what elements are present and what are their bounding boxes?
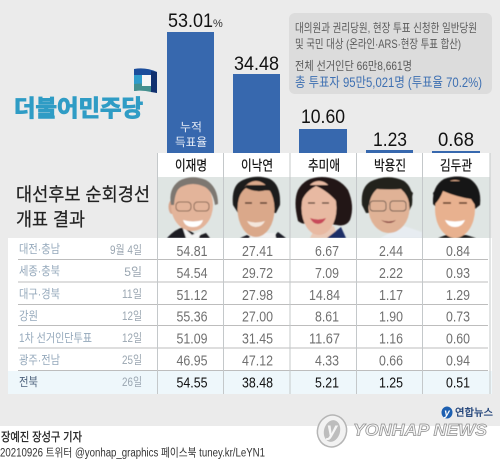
bar: 이낙연 — [233, 54, 280, 153]
row: 대구·경북: 1.17 — [379, 288, 403, 304]
row: 세종·충북 — [19, 264, 470, 282]
bar: 김두관: 0.68 — [438, 130, 474, 151]
photo: 김두관 — [433, 176, 480, 238]
row: 세종·충북: 세종·충북 — [19, 264, 60, 278]
row: 1차 선거인단투표: 0.60 — [446, 332, 470, 348]
photo: 이낙연 — [233, 177, 286, 238]
row: 대전·충남: 0.84 — [446, 244, 470, 260]
candidate name header — [157, 153, 490, 177]
row: 대전·충남: 27.41 — [242, 244, 273, 260]
row: 세종·충북: 2.22 — [379, 266, 403, 282]
info box: vote summary: 전체 선거인단 66만8,661명 — [295, 59, 412, 73]
candidate name header: 이낙연 — [241, 158, 273, 174]
row: 대전·충남: 9월 4일 — [110, 243, 142, 257]
row: 세종·충북: 54.54 — [176, 266, 208, 282]
title: 대선후보 순회경선 — [16, 184, 150, 205]
watermark: yonhap news — [314, 412, 488, 450]
candidate name header: 박용진 — [374, 158, 406, 174]
row: 강원: 강원 — [19, 309, 38, 323]
row: 전북: 26일 — [122, 375, 142, 389]
candidate name header: 이재명 — [175, 158, 207, 174]
results table — [8, 153, 492, 394]
yonhap logo: y — [443, 408, 450, 419]
row: 대구·경북: 27.98 — [242, 288, 273, 304]
party logo — [14, 68, 157, 121]
row: 전북 — [19, 375, 470, 392]
yonhap logo — [442, 406, 493, 419]
watermark: yonhap news: y — [326, 420, 339, 441]
row: 강원: 55.36 — [176, 310, 208, 326]
row: 전북: 5.21 — [315, 376, 339, 392]
photo: 이재명 — [167, 177, 218, 238]
row: 1차 선거인단투표: 51.09 — [176, 332, 208, 348]
row: 광주·전남: 47.12 — [242, 354, 273, 370]
title: 개표 결과 — [16, 209, 85, 230]
candidate name header: 추미애 — [308, 158, 340, 174]
row: 광주·전남: 4.33 — [315, 354, 339, 370]
row: 강원 — [19, 309, 470, 326]
row: 대전·충남: 대전·충남 — [19, 242, 60, 256]
party name: 더불어민주당 — [14, 95, 143, 121]
row: 광주·전남: 25일 — [122, 353, 142, 367]
row: 광주·전남: 0.94 — [446, 354, 470, 370]
bar: 이재명: % — [213, 18, 223, 30]
row: 대구·경북 — [19, 287, 470, 304]
photo: 추미애 — [296, 177, 352, 238]
bar: 이재명: 53.01 — [168, 11, 213, 32]
row: 광주·전남: 광주·전남 — [19, 353, 60, 367]
row: 1차 선거인단투표: 12일 — [122, 331, 142, 345]
credits — [0, 430, 265, 459]
row: 전북: 38.48 — [242, 376, 273, 392]
row: 전북: 1.25 — [379, 376, 403, 392]
bar: 추미애: 10.60 — [301, 107, 345, 128]
title — [16, 184, 150, 230]
row: 1차 선거인단투표: 31.45 — [242, 332, 273, 348]
candidate name header: 김두관 — [440, 158, 472, 174]
row: 세종·충북: 5일 — [124, 265, 142, 279]
row: 강원: 0.73 — [446, 310, 470, 326]
bar: 이재명: 득표율 — [175, 136, 207, 149]
yonhap logo: 연합뉴스 — [455, 407, 493, 419]
row: 대전·충남: 2.44 — [379, 244, 403, 260]
row: 1차 선거인단투표: 11.67 — [309, 332, 340, 348]
row: 세종·충북: 7.09 — [315, 266, 339, 282]
row: 강원: 12일 — [122, 309, 142, 323]
row: 세종·충북: 0.93 — [446, 266, 470, 282]
row: 1차 선거인단투표 — [19, 331, 470, 348]
row: 전북: 전북 — [19, 375, 38, 389]
row: 대구·경북: 대구·경북 — [19, 287, 60, 301]
info box: vote summary — [289, 13, 492, 94]
row: 강원: 8.61 — [315, 310, 339, 326]
candidate photos — [157, 176, 490, 238]
row: 광주·전남 — [19, 353, 470, 370]
bar chart: cumulative vote share — [167, 11, 480, 153]
watermark: yonhap news: YONHAP NEWS — [353, 420, 488, 440]
bar: 이재명 — [167, 11, 223, 153]
row: 광주·전남: 46.95 — [176, 354, 208, 370]
row: 1차 선거인단투표: 1.16 — [379, 332, 403, 348]
row: 전북: 0.51 — [446, 376, 470, 392]
bar: 박용진: 1.23 — [373, 130, 407, 151]
bar: 추미애 — [299, 107, 347, 153]
row: 강원: 27.00 — [242, 310, 273, 326]
row: 1차 선거인단투표: 1차 선거인단투표 — [19, 331, 92, 345]
credits: 장예진 장성구 기자 — [1, 430, 82, 444]
row: 전북: 54.55 — [176, 376, 208, 392]
icon: party flag — [134, 68, 157, 93]
row: 대전·충남 — [19, 242, 470, 260]
row: 대구·경북: 11일 — [122, 287, 142, 301]
bar: 이재명: 누적 — [180, 121, 202, 134]
row: 광주·전남: 0.66 — [379, 354, 403, 370]
bar: 이낙연: 34.48 — [234, 54, 279, 75]
row: 대구·경북: 1.29 — [446, 288, 470, 304]
row: 대전·충남: 54.81 — [176, 244, 208, 260]
row: 세종·충북: 29.72 — [242, 266, 273, 282]
photo: 박용진 — [362, 177, 422, 238]
row: 대전·충남: 6.67 — [315, 244, 339, 260]
row: 대구·경북: 14.84 — [309, 288, 340, 304]
row: 강원: 1.90 — [379, 310, 403, 326]
row: 대구·경북: 51.12 — [176, 288, 208, 304]
